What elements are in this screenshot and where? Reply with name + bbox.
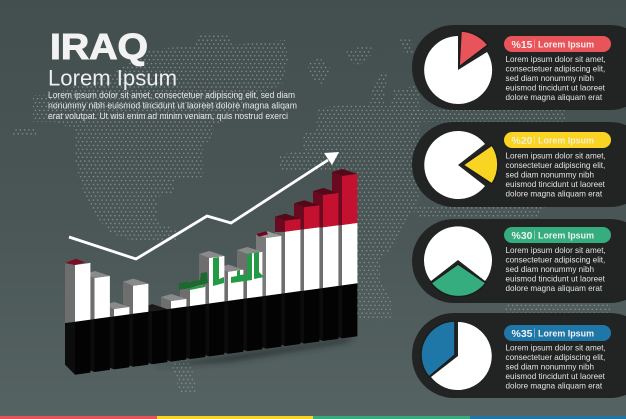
body text 30: euismod tincidunt ut laoreet	[506, 274, 606, 284]
footer colour strip	[0, 416, 626, 419]
bar 9	[218, 263, 243, 355]
label pill 30	[504, 227, 611, 243]
bar 3	[104, 300, 129, 371]
label pill 30: Lorem Ipsum	[538, 230, 594, 240]
body text 35: dolore magna aliquam erat	[506, 382, 603, 390]
body text 15: euismod tincidunt ut laoreet	[506, 84, 606, 92]
bar 13	[294, 198, 319, 345]
intro paragraph: Lorem ipsum dolor sit amet, consectetuer adipiscing elit, sed diam	[48, 90, 295, 101]
bar 7	[180, 279, 205, 360]
label pill 35: Lorem Ipsum	[538, 328, 594, 338]
intro paragraph: nonummy nibh euismod tincidunt ut laoreet dolore magna aliqam	[48, 100, 297, 112]
panel: 20 percent	[412, 122, 626, 207]
bar 14	[313, 186, 338, 342]
body text 35: sed diam nonummy nibh	[506, 362, 594, 372]
subtitle: Lorem Ipsum	[48, 66, 177, 90]
label pill 20: %20	[512, 135, 533, 147]
bar 15	[332, 167, 357, 340]
body text 20: Lorem ipsum dolor sit amet,	[506, 152, 606, 160]
body text 20: sed diam nonummy nibh	[506, 170, 594, 180]
intro paragraph	[48, 90, 297, 122]
pie chart 30	[424, 226, 492, 297]
label pill 30: %30	[512, 230, 533, 242]
bar 12	[275, 212, 300, 347]
bar 8	[199, 249, 224, 358]
body text 30: sed diam nonummy nibh	[506, 265, 594, 274]
panel: 30 percent	[412, 219, 626, 303]
body text 30: dolore magna aliquam erat	[506, 284, 603, 293]
pie chart 15	[424, 31, 492, 104]
label pill 15: %15	[512, 39, 533, 51]
label pill 15: Lorem Ipsum	[538, 40, 594, 50]
label pill 20	[504, 132, 611, 148]
bar 1	[65, 257, 90, 376]
body text 30: Lorem ipsum dolor sit amet,	[506, 246, 606, 255]
bar 4	[123, 277, 148, 368]
pie chart 20	[424, 131, 498, 199]
label pill 35: %35	[512, 328, 533, 340]
growth arrow	[69, 152, 339, 259]
body text 35: consectetuer adipiscing elit,	[506, 353, 605, 362]
bar 6	[161, 292, 186, 363]
body text 20: consectetuer adipiscing elit,	[506, 161, 605, 170]
bar 11	[256, 229, 281, 350]
bar chart: flag bars	[65, 167, 357, 376]
body text 35	[506, 344, 606, 390]
panel: 35 percent	[412, 313, 626, 398]
body text 30: consectetuer adipiscing elit,	[506, 256, 605, 264]
body text 20: euismod tincidunt ut laoreet	[506, 180, 606, 189]
title: IRAQ	[50, 26, 148, 67]
body text 30	[506, 246, 606, 293]
pie chart 35	[421, 321, 492, 390]
intro paragraph: erat volutpat. Ut wisi enim ad minim veniam, quis nostrud exerci	[48, 111, 288, 122]
label pill 35	[504, 325, 611, 341]
body text 15: dolore magna aliquam erat	[506, 93, 603, 102]
body text 15: Lorem ipsum dolor sit amet,	[506, 55, 606, 64]
bar 5	[142, 302, 167, 366]
body text 15: consectetuer adipiscing elit,	[506, 64, 605, 74]
bar 2	[84, 269, 110, 373]
body text 15	[506, 55, 606, 102]
label pill 20: Lorem Ipsum	[538, 136, 594, 146]
label pill 15	[504, 36, 611, 52]
body text 15: sed diam nonummy nibh	[506, 74, 594, 83]
body text 20	[506, 152, 606, 198]
bar 10	[237, 245, 262, 353]
body text 20: dolore magna aliquam erat	[506, 190, 603, 198]
body text 35: euismod tincidunt ut laoreet	[506, 372, 606, 381]
body text 35: Lorem ipsum dolor sit amet,	[506, 344, 606, 352]
panel: 15 percent	[412, 25, 626, 110]
bar chart shadow	[150, 336, 357, 367]
flag script on bars	[179, 252, 264, 290]
